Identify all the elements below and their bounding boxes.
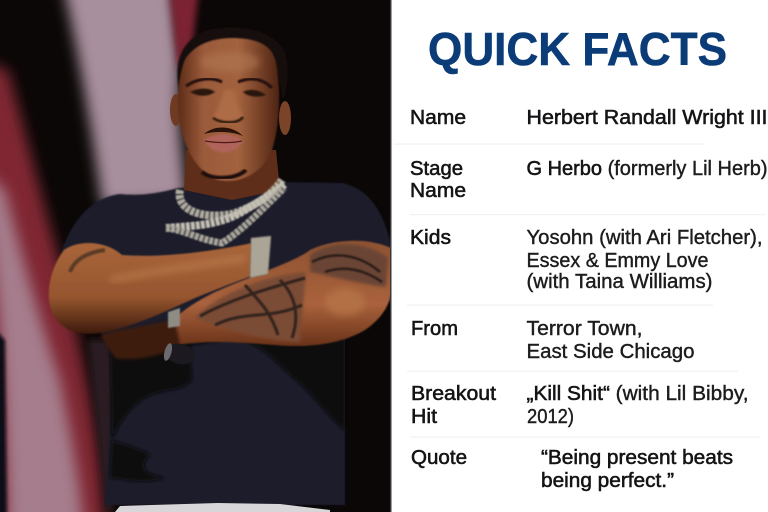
row: from [411, 318, 694, 363]
row: name [410, 107, 768, 129]
value: (with Taina Williams) [526, 271, 712, 293]
right arm (image right) [172, 241, 391, 346]
value: 2012) [527, 406, 574, 428]
bracelet [250, 236, 271, 278]
label: Kids [410, 227, 451, 249]
necklace [166, 180, 285, 243]
white waistband [115, 503, 330, 512]
row: stage name [410, 158, 768, 202]
forearm highlight [110, 258, 245, 280]
microphone [164, 343, 194, 364]
nose shadow [213, 117, 243, 122]
left arm (image left) [49, 243, 252, 334]
wrist bracelet lower [168, 308, 180, 328]
label: Quote [411, 447, 467, 469]
forehead highlight [200, 52, 260, 72]
value: Essex & Emmy Love [526, 250, 708, 272]
hand under arm [100, 320, 180, 359]
value: „Kill Shit“ (with Lil Bibby, [526, 383, 748, 405]
neck [184, 150, 280, 200]
row: kids [410, 227, 762, 293]
value: East Side Chicago [526, 341, 694, 363]
ear right [279, 101, 291, 135]
value [541, 447, 733, 492]
value: Yosohn (with Ari Fletcher), [526, 227, 762, 249]
beard [202, 170, 246, 178]
label: Stage [410, 158, 463, 180]
ear left [170, 94, 180, 126]
label: Name [410, 180, 466, 202]
value: Herbert Randall Wright III [526, 107, 768, 129]
label: Breakout [411, 383, 496, 405]
tattoo forearm [195, 272, 306, 342]
label: Hit [411, 406, 437, 428]
value: “Being present beats [541, 447, 733, 469]
value: being perfect.” [541, 470, 674, 492]
title: QUICK FACTS [428, 23, 727, 75]
row: quote [411, 447, 733, 492]
value [526, 383, 748, 428]
stage backdrop [0, 0, 390, 512]
lips [204, 134, 243, 153]
value: G Herbo (formerly Lil Herb) [526, 158, 768, 180]
head [170, 27, 291, 181]
value [526, 318, 694, 363]
photo: performer on stage [0, 0, 391, 512]
label [411, 383, 496, 428]
hair [177, 27, 288, 100]
divider strip between photo and panel [390, 0, 392, 512]
moustache [204, 127, 243, 136]
face [178, 38, 279, 181]
brows [186, 79, 272, 88]
label [410, 158, 466, 202]
eyes [190, 89, 266, 97]
label: Name [410, 107, 466, 129]
elbow highlight [325, 288, 365, 316]
value: Terror Town, [526, 318, 642, 340]
tattoo [70, 250, 105, 272]
tattoo upper [310, 244, 388, 287]
value [526, 227, 762, 293]
t-shirt [60, 182, 391, 505]
nose [214, 90, 242, 120]
row: breakout hit [411, 383, 748, 428]
label: From [411, 318, 458, 340]
